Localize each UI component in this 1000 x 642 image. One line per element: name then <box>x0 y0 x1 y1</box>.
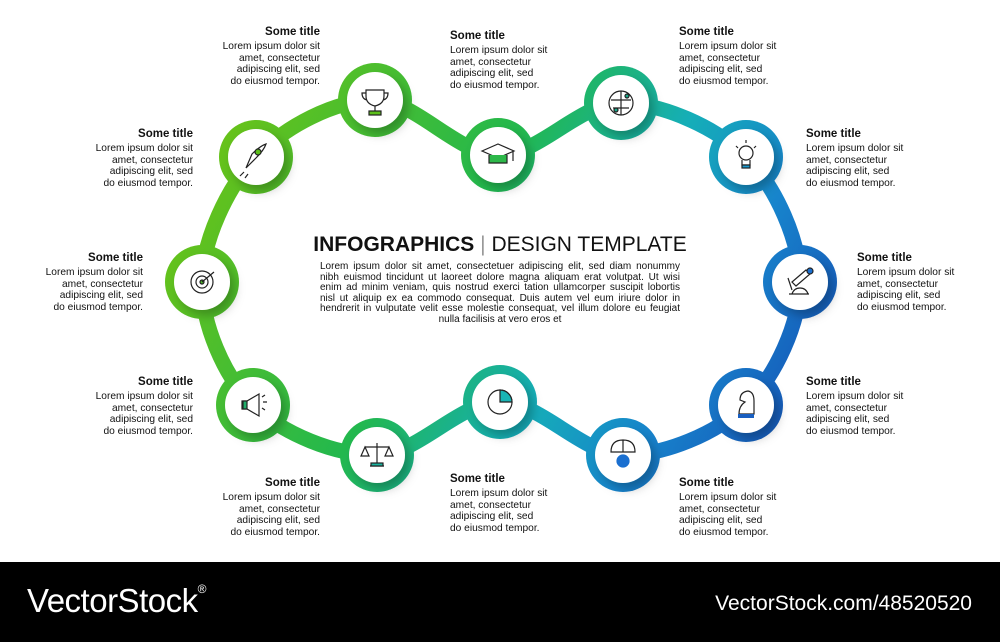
text: item 8: Some title <box>679 477 734 489</box>
text: item 9: adipiscing elit, sed <box>450 511 533 522</box>
text: item 2: do eiusmod tempor. <box>231 76 320 87</box>
text: item 2: adipiscing elit, sed <box>237 64 320 75</box>
text: item 5: amet, consectetur <box>806 155 887 166</box>
text: item 11: amet, consectetur <box>112 403 193 414</box>
text: item 3: Some title <box>450 30 505 42</box>
icon: graduation cap <box>482 144 514 163</box>
text: item 3 <box>450 30 548 91</box>
text: item 5: do eiusmod tempor. <box>806 178 895 189</box>
icon: pie clock <box>488 390 512 414</box>
text: item 10: Lorem ipsum dolor sit <box>223 492 320 503</box>
text: item 11 <box>96 376 193 437</box>
track <box>202 100 800 455</box>
icon: rocket <box>240 144 266 178</box>
icon: target <box>191 271 214 293</box>
text: item 1: do eiusmod tempor. <box>104 178 193 189</box>
text: item 1 <box>96 128 193 189</box>
text: item 6 <box>857 252 954 313</box>
text: item 4: amet, consectetur <box>679 53 760 64</box>
text: item 8: do eiusmod tempor. <box>679 527 768 538</box>
text: item 11: adipiscing elit, sed <box>110 414 193 425</box>
text: item 7: Lorem ipsum dolor sit <box>806 391 903 402</box>
text: item 7: Some title <box>806 376 861 388</box>
text: item 7: amet, consectetur <box>806 403 887 414</box>
center paragraph: Lorem ipsum dolor sit amet, consectetuer adipiscing elit, sed diam nonummy nibh euismod tincidunt ut laoreet dolore magna aliquam erat volutpat. Ut wisi enim ad minim veniam, quis nostrud exerci tation ullamcorper suscipit lobortis nisl ut aliquip ex ea commodo consequat. Duis autem vel eum iriure dolor in hendrerit in vulputate velit esse molestie consequat, vel illum dolore eu feugiat nulla facilisis at vero eros et <box>320 261 680 325</box>
text: item 12 <box>46 252 143 313</box>
text: item 9: Lorem ipsum dolor sit <box>450 488 547 499</box>
text: item 8 <box>679 477 776 538</box>
text: item 7: adipiscing elit, sed <box>806 414 889 425</box>
footer bar <box>0 562 1000 642</box>
text: item 8: amet, consectetur <box>679 504 760 515</box>
text: item 10: amet, consectetur <box>239 504 320 515</box>
text: item 12: adipiscing elit, sed <box>60 290 143 301</box>
text: item 3: adipiscing elit, sed <box>450 68 533 79</box>
text: item 7: do eiusmod tempor. <box>806 426 895 437</box>
text: item 7 <box>806 376 904 437</box>
text: item 4: adipiscing elit, sed <box>679 64 762 75</box>
text: item 1: Some title <box>138 128 193 140</box>
icon: trophy <box>362 90 388 115</box>
icon: chess knight <box>738 391 754 418</box>
text: item 6: adipiscing elit, sed <box>857 290 940 301</box>
text: item 11: Lorem ipsum dolor sit <box>96 391 193 402</box>
text: item 12: Lorem ipsum dolor sit <box>46 267 143 278</box>
text: item 5: Some title <box>806 128 861 140</box>
icon: helmet gear <box>611 440 635 467</box>
text: item 3: Lorem ipsum dolor sit <box>450 45 547 56</box>
text: item 9: do eiusmod tempor. <box>450 523 539 534</box>
text: item 1: amet, consectetur <box>112 155 193 166</box>
footer logo: VectorStock® <box>27 582 206 619</box>
text: item 11: do eiusmod tempor. <box>104 426 193 437</box>
text: item 3: amet, consectetur <box>450 57 531 68</box>
icon: microscope <box>788 268 813 294</box>
text: item 6: amet, consectetur <box>857 279 938 290</box>
text: item 1: adipiscing elit, sed <box>110 166 193 177</box>
text: item 9 <box>450 473 548 534</box>
text: item 5 <box>806 128 904 189</box>
text: item 5: adipiscing elit, sed <box>806 166 889 177</box>
text: item 5: Lorem ipsum dolor sit <box>806 143 903 154</box>
icon: bulb <box>736 140 756 168</box>
text: item 3: do eiusmod tempor. <box>450 80 539 91</box>
text: item 11: Some title <box>138 376 193 388</box>
text: item 6: Lorem ipsum dolor sit <box>857 267 954 278</box>
text: item 4: Some title <box>679 26 734 38</box>
text: item 2 <box>223 26 320 87</box>
text: item 6: Some title <box>857 252 912 264</box>
center title: INFOGRAPHICS | DESIGN TEMPLATE <box>313 233 687 256</box>
text: item 10: Some title <box>265 477 320 489</box>
footer url: VectorStock.com/48520520 <box>715 592 972 615</box>
text: item 6: do eiusmod tempor. <box>857 302 946 313</box>
text: item 12: amet, consectetur <box>62 279 143 290</box>
text: item 1: Lorem ipsum dolor sit <box>96 143 193 154</box>
text: item 9: amet, consectetur <box>450 500 531 511</box>
icon: scales <box>361 443 393 466</box>
text: item 2: Some title <box>265 26 320 38</box>
text: item 2: Lorem ipsum dolor sit <box>223 41 320 52</box>
text: item 4: do eiusmod tempor. <box>679 76 768 87</box>
icon: brain <box>609 91 633 115</box>
circles <box>165 63 837 492</box>
text: item 8: Lorem ipsum dolor sit <box>679 492 776 503</box>
text: item 4 <box>679 26 776 87</box>
text: item 12: do eiusmod tempor. <box>54 302 143 313</box>
text: item 10 <box>223 477 320 538</box>
icon: megaphone <box>242 394 267 416</box>
text: item 12: Some title <box>88 252 143 264</box>
text: item 2: amet, consectetur <box>239 53 320 64</box>
text: item 9: Some title <box>450 473 505 485</box>
text: item 8: adipiscing elit, sed <box>679 515 762 526</box>
text: item 10: adipiscing elit, sed <box>237 515 320 526</box>
text: item 4: Lorem ipsum dolor sit <box>679 41 776 52</box>
text: item 10: do eiusmod tempor. <box>231 527 320 538</box>
